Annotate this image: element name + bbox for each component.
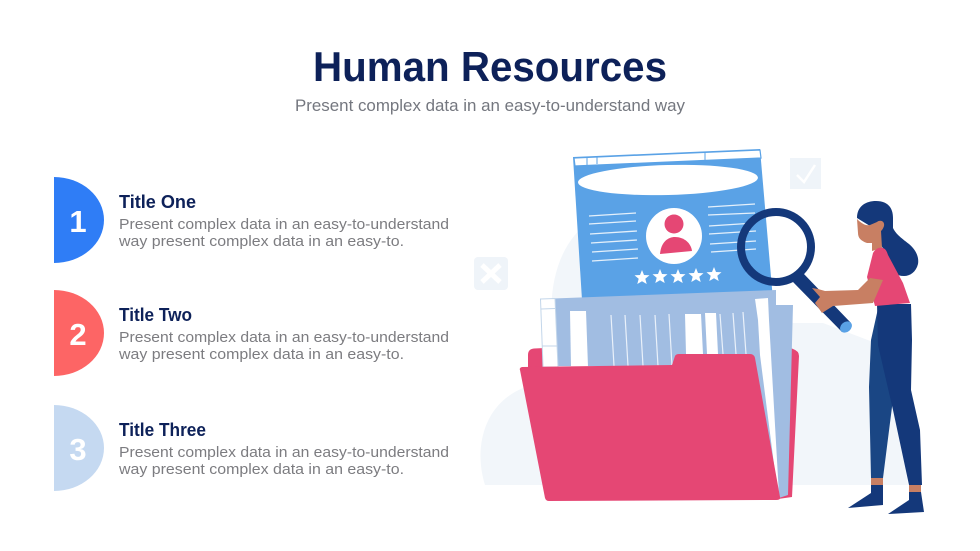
folder front	[520, 354, 780, 501]
shirt	[867, 248, 910, 306]
item three text: Present complex data in an easy-to-understand	[119, 444, 449, 461]
item one heading: Title One	[119, 192, 196, 212]
item two text	[118, 329, 449, 363]
background blob	[481, 222, 908, 485]
icon: x mark tile	[474, 257, 508, 290]
icon: check tile	[790, 158, 821, 189]
item one text	[118, 216, 449, 250]
profile document	[573, 149, 773, 300]
profile lines	[589, 204, 756, 261]
ankles	[871, 478, 921, 492]
number badge two: 2	[69, 317, 87, 352]
illustration	[474, 149, 924, 514]
item three	[54, 405, 449, 491]
item three text: way present complex data in an easy-to.	[118, 461, 404, 478]
avatar	[646, 208, 702, 264]
item two text: way present complex data in an easy-to.	[118, 346, 404, 363]
rating stars	[634, 267, 722, 284]
number badge two	[54, 290, 104, 376]
folder back	[528, 345, 799, 499]
data document	[540, 290, 793, 498]
shoes	[848, 485, 924, 514]
number badge three	[54, 405, 104, 491]
item three heading: Title Three	[119, 420, 206, 440]
item three text	[118, 444, 449, 478]
item two text: Present complex data in an easy-to-understand	[119, 329, 449, 346]
item one text: Present complex data in an easy-to-understand	[119, 216, 449, 233]
number badge three: 3	[69, 432, 87, 467]
item one text: way present complex data in an easy-to.	[118, 233, 404, 250]
arm and hand	[812, 278, 883, 313]
front leg	[877, 304, 922, 485]
magnifier	[741, 212, 854, 335]
number badge one: 1	[69, 204, 87, 239]
item two	[54, 290, 449, 376]
number badge one	[54, 177, 104, 263]
back leg	[869, 304, 900, 478]
head and neck	[857, 219, 884, 251]
subtitle: Present complex data in an easy-to-understand way	[295, 96, 685, 115]
person	[812, 201, 924, 514]
title: Human Resources	[313, 43, 667, 90]
hair	[857, 201, 918, 276]
item one	[54, 177, 449, 263]
item two heading: Title Two	[119, 305, 192, 325]
